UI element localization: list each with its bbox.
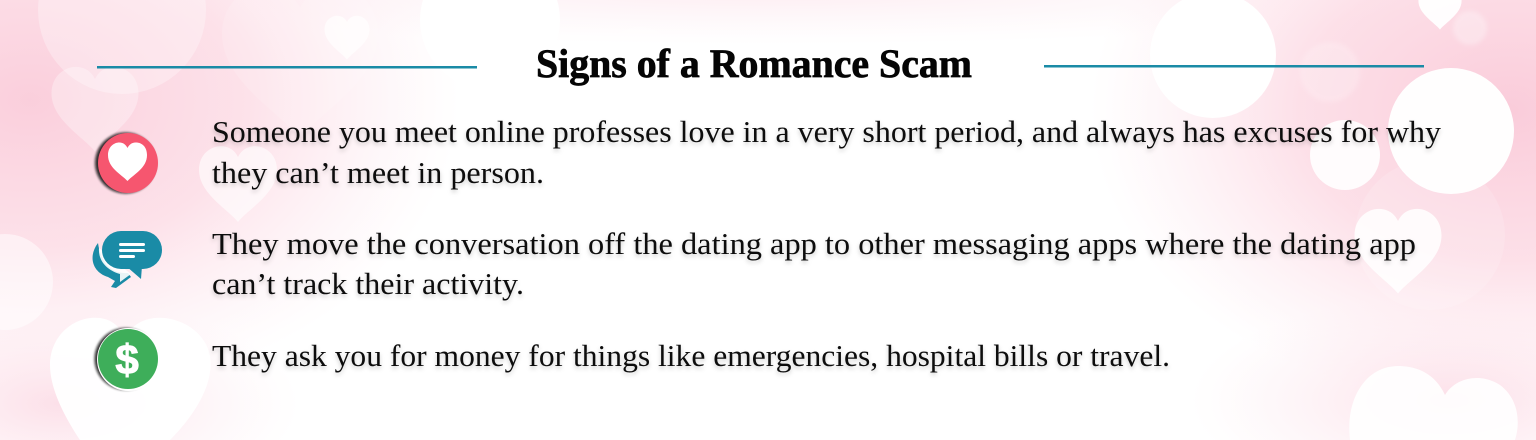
left title rule [97,66,477,68]
text: sign two: They move the conversation off the dating app to other messaging apps where the dating app [212,226,1416,261]
text: sign two continued: can’t track their activity. [212,266,524,301]
text: sign one: Someone you meet online professes love in a very short period, and always has excuses for why [212,114,1442,149]
right title rule [1044,65,1424,68]
title: Signs of a Romance Scam [536,41,972,86]
icon: dollar badge [94,328,160,391]
icon: dollar badge: $ [115,336,139,383]
icon: chat bubbles [93,231,162,288]
text: sign one continued: they can’t meet in person. [212,155,544,190]
text: sign three: They ask you for money for things like emergencies, hospital bills or travel. [212,338,1170,373]
icon: heart badge [95,132,158,194]
